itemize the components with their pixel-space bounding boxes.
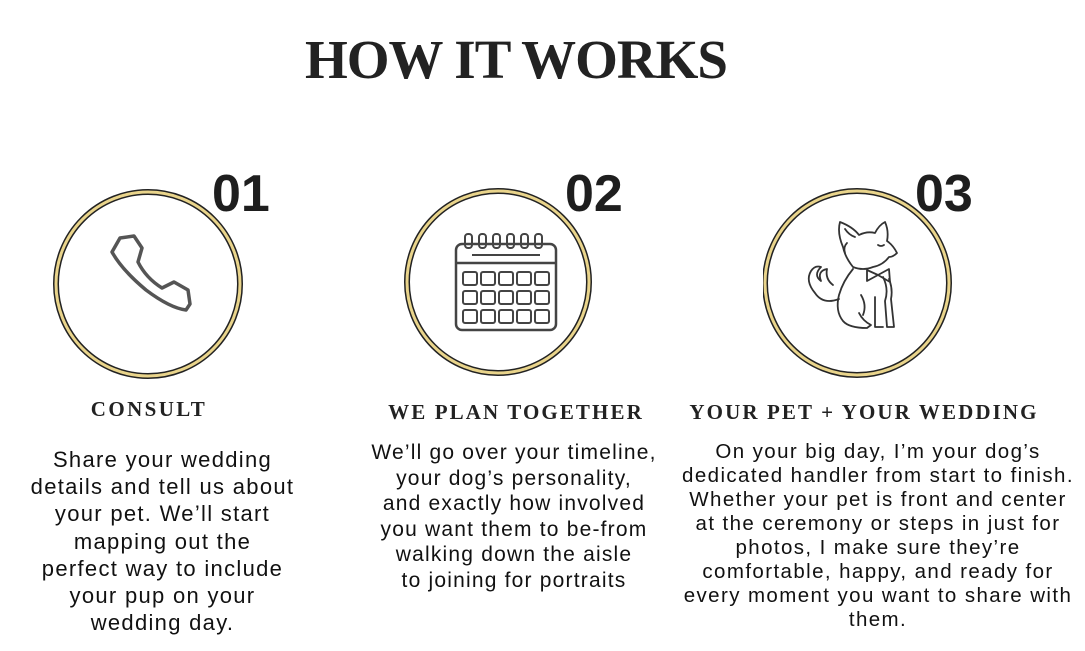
body text 3: photos, I make sure they’re [735, 536, 1021, 559]
icon: dog circle [763, 188, 952, 378]
body text 3: On your big day, I’m your dog’s [715, 440, 1041, 463]
body text 1: your pet. We’ll start [55, 501, 270, 526]
body text 3: comfortable, happy, and ready for [702, 560, 1054, 583]
body text 3: every moment you want to share with [684, 584, 1072, 607]
heading: we plan together: WE PLAN TOGETHER [388, 400, 644, 424]
body text 1 [31, 447, 294, 635]
body text 2: to joining for portraits [402, 568, 626, 592]
body text 2 [371, 441, 657, 592]
step 2 [371, 165, 657, 592]
body text 2: and exactly how involved [383, 492, 645, 515]
step 1 [31, 165, 294, 635]
body text 1: mapping out the [74, 529, 251, 554]
number 01: 01 [212, 165, 270, 223]
body text 3: them. [849, 608, 907, 631]
body text 1: wedding day. [91, 610, 234, 635]
heading: consult: CONSULT [91, 397, 207, 421]
number 03: 03 [915, 165, 973, 223]
body text 2: We’ll go over your timeline, [371, 441, 657, 464]
body text 1: details and tell us about [31, 474, 294, 499]
body text 3: dedicated handler from start to finish. [682, 464, 1074, 487]
body text 1: Share your wedding [53, 447, 272, 472]
body text 3 [682, 440, 1074, 631]
body text 3: at the ceremony or steps in just for [696, 512, 1060, 535]
body text 2: your dog’s personality, [396, 466, 632, 490]
body text 1: your pup on your [70, 583, 255, 608]
body text 2: you want them to be-from [381, 518, 647, 540]
number 02: 02 [565, 165, 623, 223]
body text 3: Whether your pet is front and center [689, 488, 1067, 511]
heading: your pet + your wedding: YOUR PET + YOUR WEDDING [689, 400, 1039, 424]
title: HOW IT WORKS [305, 29, 727, 90]
icon: phone circle [53, 189, 243, 379]
body text 1: perfect way to include [42, 556, 283, 581]
step 3 [682, 165, 1074, 631]
icon: calendar circle [404, 188, 592, 376]
body text 2: walking down the aisle [396, 543, 632, 566]
